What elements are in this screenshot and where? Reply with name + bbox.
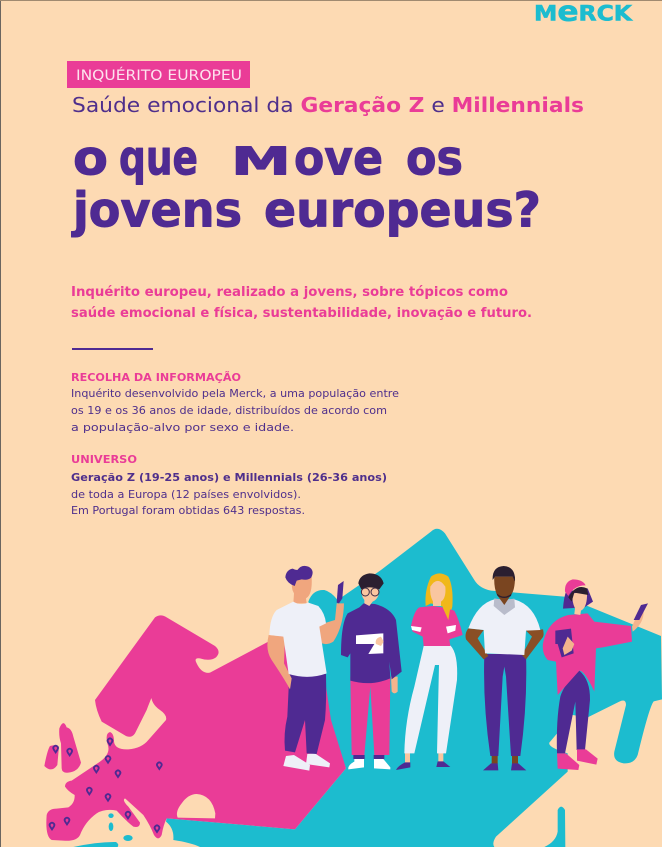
text block: recolha da informação: a população-alvo por sexo e idade. xyxy=(71,421,294,434)
intro text: Inquérito europeu, realizado a jovens, sobre tópicos como xyxy=(71,284,508,300)
hair xyxy=(493,566,515,581)
trousers xyxy=(404,645,457,753)
neck and head xyxy=(292,577,312,603)
phone xyxy=(634,603,648,620)
cuffs and shoes xyxy=(348,755,390,769)
collar xyxy=(494,598,515,615)
shoes xyxy=(283,753,330,771)
paper and arm xyxy=(356,633,384,654)
boots xyxy=(557,749,598,770)
text block: universo: de toda a Europa (12 países envolvidos). xyxy=(71,488,301,501)
person 3: blonde woman xyxy=(396,573,463,770)
title: jovens xyxy=(71,182,242,238)
title: os xyxy=(406,130,463,186)
glasses xyxy=(361,588,379,596)
cuffs xyxy=(411,625,456,633)
phone xyxy=(337,581,344,603)
title: que xyxy=(119,130,198,186)
hair xyxy=(425,573,453,620)
beard xyxy=(497,593,512,598)
intro text xyxy=(71,284,532,321)
sweater xyxy=(543,613,632,695)
left arm xyxy=(267,635,292,689)
title: ove xyxy=(294,130,383,186)
trousers xyxy=(350,677,390,755)
tag: Inquérito Europeu: INQUÉRITO EUROPEU xyxy=(76,67,242,84)
mainland Europe and Scandinavia xyxy=(46,615,346,841)
map of Europe, pink xyxy=(44,615,346,841)
raised arm xyxy=(318,603,344,644)
subtitle: Saúde emocional da Geração Z e Millennials xyxy=(72,93,584,117)
Mediterranean islands xyxy=(108,813,133,841)
person 5: woman in beanie xyxy=(543,579,648,770)
text block: recolha da informação: Inquérito desenvolvido pela Merck, a uma população entre xyxy=(71,387,399,400)
text block: universo: Em Portugal foram obtidas 643 respostas. xyxy=(71,504,305,517)
Black Sea xyxy=(177,794,215,818)
shirt xyxy=(269,602,327,677)
hand xyxy=(391,677,398,693)
text block: recolha da informação: os 19 e os 36 anos de idade, distribuídos de acordo com xyxy=(71,404,387,417)
intro text: saúde emocional e física, sustentabilidade, inovação e futuro. xyxy=(71,305,532,321)
person 4: man in white shirt xyxy=(466,566,544,770)
text block: universo xyxy=(71,453,387,517)
text block: recolha da informação xyxy=(71,371,399,434)
person 1: man with phone xyxy=(267,566,344,771)
sweater xyxy=(341,603,402,683)
arms xyxy=(466,628,544,659)
tag: Inquérito Europeu xyxy=(67,61,250,88)
icon: Great Britain xyxy=(59,723,81,773)
neck and face xyxy=(361,585,379,606)
sweater xyxy=(411,606,463,646)
title: M xyxy=(231,140,291,184)
location pins xyxy=(50,738,162,832)
hand on book xyxy=(563,637,574,655)
book xyxy=(555,629,574,657)
person 2: man with glasses xyxy=(341,573,402,769)
title: o xyxy=(73,130,108,186)
neck and head xyxy=(494,577,515,605)
hair back xyxy=(563,588,593,609)
ankles xyxy=(492,755,518,764)
face and neck xyxy=(430,581,445,606)
teal landmass xyxy=(166,529,662,847)
face xyxy=(572,592,587,615)
Africa sliver xyxy=(73,842,118,847)
shirt xyxy=(468,599,540,655)
hair xyxy=(285,566,313,586)
hair xyxy=(358,573,384,590)
raised hand xyxy=(632,610,644,632)
trousers xyxy=(285,673,326,754)
ankles xyxy=(405,752,443,764)
trousers xyxy=(484,654,526,756)
text block: recolha da informação: RECOLHA DA INFORMAÇÃO xyxy=(71,371,241,384)
leggings xyxy=(557,671,590,753)
title xyxy=(71,130,541,238)
hair fringe xyxy=(568,587,588,602)
map of Europe, teal xyxy=(73,529,662,847)
shoes xyxy=(483,763,526,770)
shoes xyxy=(396,761,450,770)
icon: Ireland xyxy=(44,745,59,769)
beanie xyxy=(565,579,586,596)
text block: universo: UNIVERSO xyxy=(71,453,137,466)
title: europeus? xyxy=(264,182,541,238)
text block: universo: Geração Z (19-25 anos) e Millennials (26-36 anos) xyxy=(71,471,387,484)
